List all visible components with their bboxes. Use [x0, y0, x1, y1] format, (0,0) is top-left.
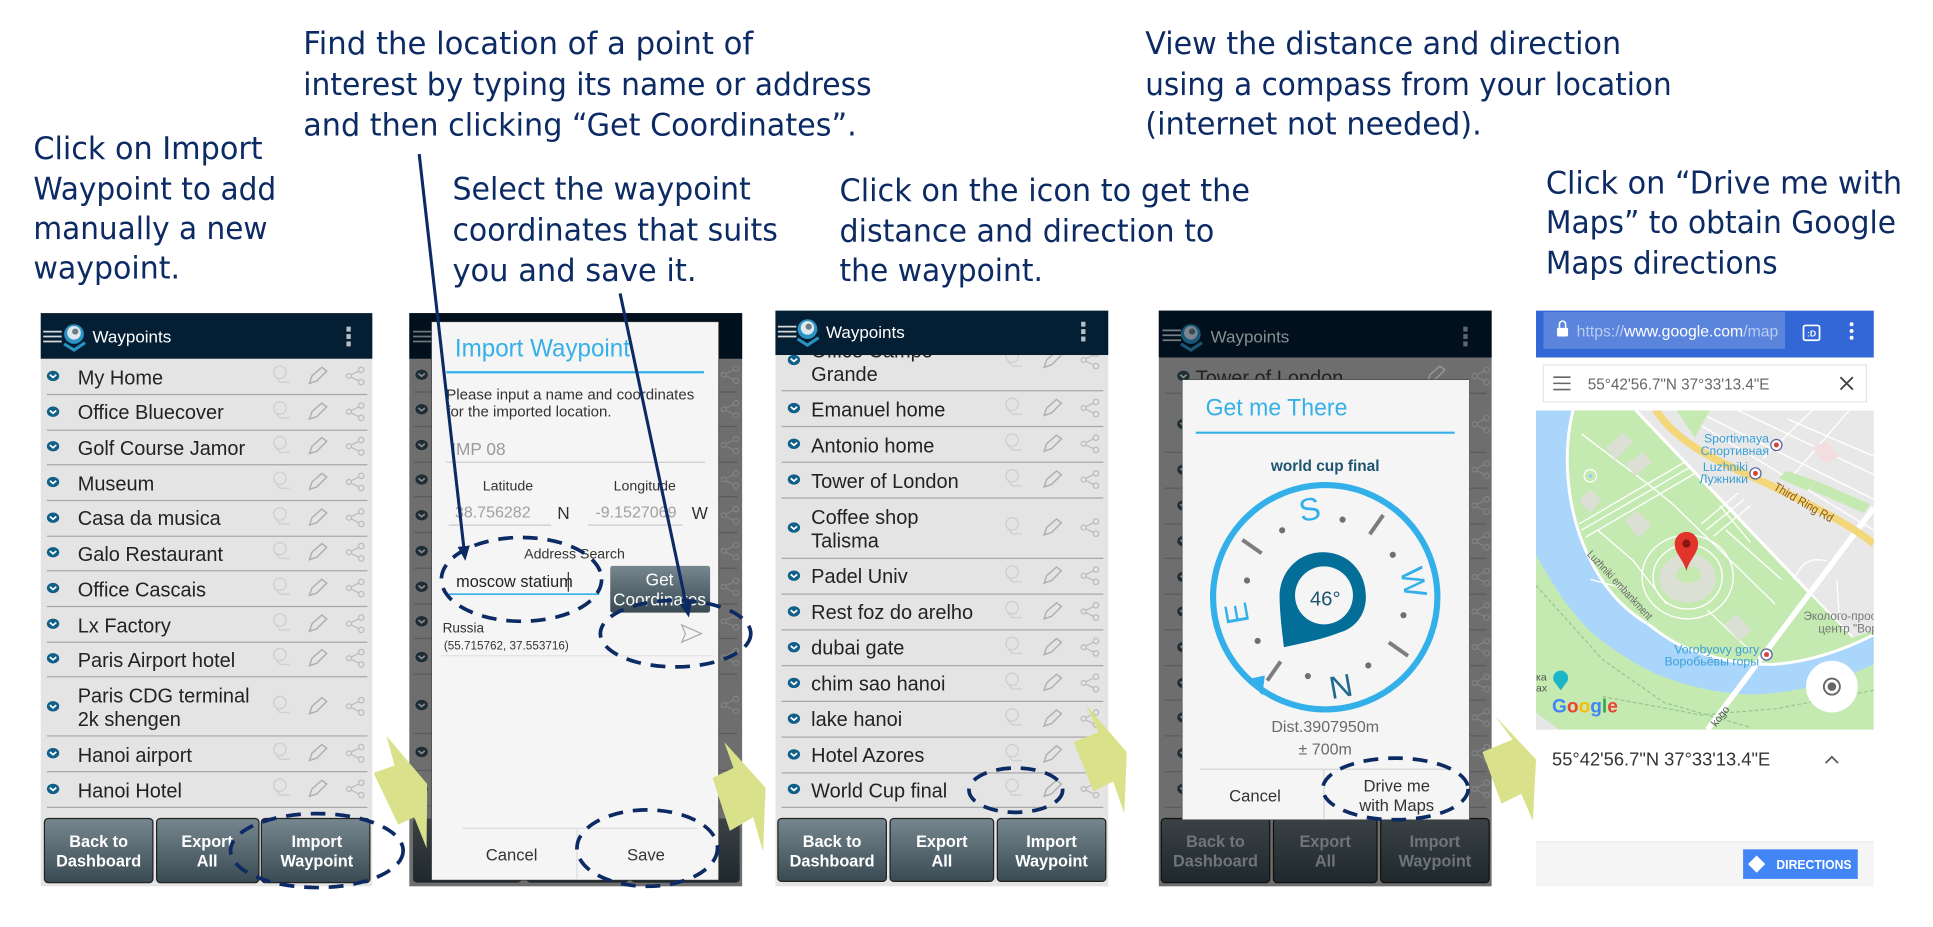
panel: phone 2 import waypoint background	[409, 313, 742, 886]
phone 3 list rows: Hotel Azores	[811, 745, 924, 767]
callout: import waypoint instruction: manually a new	[33, 211, 268, 247]
coordinates line: 55°42'56.7"N 37°33'13.4"E	[1552, 749, 1770, 770]
callout: import waypoint instruction	[33, 131, 276, 287]
dialog form fields	[446, 439, 709, 594]
callout: click icon instruction: the waypoint.	[840, 253, 1043, 289]
phone 3 list rows: Padel Univ	[811, 566, 908, 588]
phone 3 list rows: Coffee shop	[811, 507, 918, 529]
phone 3 list rows: lake hanoi	[811, 709, 902, 731]
phone 1 list rows: 2k shengen	[78, 709, 181, 731]
panel: phone 1 waypoints list	[41, 313, 372, 886]
callout: drive me with maps instruction: Click on “Drive me with	[1546, 166, 1902, 202]
dialog actions: Cancel	[486, 845, 538, 864]
phone 1 list rows: Golf Course Jamor	[78, 438, 246, 460]
search result: Russia	[443, 620, 484, 635]
dashed ellipse: save	[577, 810, 717, 886]
phone 3 list rows	[782, 340, 1103, 807]
map labels: Luzhniki	[1703, 460, 1748, 474]
dialog actions: Cancel	[1229, 786, 1281, 805]
get coordinates button: Get	[646, 570, 674, 590]
phone 1 list rows: Paris CDG terminal	[78, 686, 250, 708]
get coordinates button	[610, 566, 710, 613]
phone 3 buttons: All	[931, 853, 952, 871]
dialog form fields: -9.1527069	[595, 504, 677, 522]
panel: phone 5 google maps	[1536, 311, 1885, 886]
place icon	[1553, 671, 1568, 690]
map labels: Vorobyovy gory	[1674, 642, 1760, 656]
map labels: центр "Воро	[1818, 622, 1885, 635]
directions footer	[1536, 842, 1874, 886]
dashed ellipse: pin icon	[969, 768, 1063, 812]
dialog form fields: IMP 08	[451, 439, 506, 459]
callout: select coordinates instruction: Select the waypoint	[452, 172, 751, 208]
panel: phone 4 background: Dashboard	[1173, 853, 1258, 871]
phone 3 list rows: Office Campo	[811, 340, 933, 362]
callout: click icon instruction	[840, 173, 1250, 289]
get coordinates button: Coordinates	[613, 589, 706, 609]
phone 3 buttons: Back to	[803, 833, 862, 851]
map pin	[1675, 532, 1698, 571]
dialog heading: Get me There	[1206, 394, 1347, 421]
compass	[1200, 473, 1450, 723]
phone 3 buttons: Import	[1026, 833, 1077, 851]
map labels: kogo	[1710, 704, 1732, 729]
dialog actions: Save	[627, 845, 665, 864]
map search box: 55°42'56.7"N 37°33'13.4"E	[1588, 377, 1769, 394]
phone 3 buttons: Dashboard	[790, 853, 875, 871]
panel: phone 4 background: Tower of London	[1196, 368, 1343, 390]
phone 3 list rows: Grande	[811, 364, 878, 386]
phone 1 buttons: Import	[292, 833, 343, 851]
metro icons	[1750, 439, 1782, 660]
phone 3 list rows: Talisma	[811, 530, 880, 552]
dialog form fields: Latitude	[483, 479, 533, 495]
dialog form fields: W	[692, 503, 709, 523]
callout: drive me with maps instruction: Maps directions	[1546, 246, 1778, 282]
phone 3 list rows: dubai gate	[811, 638, 904, 660]
dialog form fields: Longitude	[614, 479, 676, 495]
dialog description: for the imported location.	[446, 404, 612, 421]
panel: phone 3 waypoints list	[775, 311, 1108, 886]
locate button	[1806, 661, 1858, 713]
dialog actions	[1199, 769, 1452, 820]
browser bar	[1536, 311, 1874, 357]
phone 1 buttons: Waypoint	[281, 853, 354, 871]
map labels: Лужники	[1699, 472, 1748, 486]
panel: phone 4 background: Import	[1410, 833, 1461, 851]
panel: phone 4 background	[1159, 311, 1492, 886]
phone 1 list rows: My Home	[78, 368, 163, 390]
distance text	[1271, 718, 1379, 758]
phone 1 list rows: Paris Airport hotel	[78, 650, 235, 672]
callout: import waypoint instruction: Waypoint to add	[33, 172, 276, 208]
phone 3 list rows: Antonio home	[811, 435, 934, 457]
phone 1 buttons: Back to	[69, 833, 128, 851]
panel: get me there dialog	[1182, 380, 1469, 820]
map labels: Luzhniki embankment	[1584, 549, 1655, 623]
distance text: ± 700m	[1299, 740, 1352, 758]
phone 3 buttons	[778, 819, 1106, 881]
map labels: Воробьёвы горы	[1664, 655, 1759, 669]
compass pin with bearing: 46°	[1310, 588, 1341, 610]
dashed ellipse: send icon	[600, 600, 751, 667]
callout: select coordinates instruction	[452, 172, 778, 289]
panel: phone 4 background: Export	[1299, 833, 1352, 851]
phone 3 list rows: Rest foz do arelho	[811, 602, 973, 624]
callout: drive me with maps instruction	[1546, 166, 1902, 282]
phone 1 header	[41, 313, 372, 359]
map labels: Спортивная	[1701, 444, 1769, 458]
map labels: Sportivnaya	[1704, 432, 1769, 446]
phone 3 list rows: Emanuel home	[811, 400, 945, 422]
callout: compass instruction	[1145, 26, 1672, 142]
map	[1536, 409, 1885, 730]
dialog description: Please input a name and coordinates	[446, 386, 694, 403]
panel: import waypoint dialog	[432, 322, 719, 880]
callout: import waypoint instruction: waypoint.	[33, 251, 180, 287]
callout: compass instruction: View the distance and direction	[1145, 26, 1621, 62]
phone 3 list rows: World Cup final	[811, 781, 947, 803]
phone 1 buttons: Export	[181, 833, 233, 851]
phone 1 list rows: Office Bluecover	[78, 402, 224, 424]
arrow: lime step arrow 2	[713, 742, 766, 852]
map labels: Эколого-просв	[1804, 610, 1883, 623]
phone 1 list rows: Museum	[78, 474, 154, 496]
search result	[441, 620, 713, 656]
browser bar: https://www.google.com/map	[1577, 324, 1778, 341]
dashed ellipse: import waypoint button	[231, 814, 403, 888]
map labels: ах	[1536, 684, 1548, 695]
panel: phone 4 background: Back to	[1186, 833, 1245, 851]
phone 1 list rows: Hanoi airport	[78, 745, 192, 767]
phone 1 list rows	[47, 366, 367, 807]
phone 1 buttons: Dashboard	[56, 853, 141, 871]
phone 1 header: Waypoints	[93, 328, 171, 347]
callout: find location instruction: and then clicking “Get Coordinates”.	[303, 108, 857, 144]
phone 3 header	[775, 311, 1108, 355]
phone 3 list rows: Tower of London	[811, 471, 959, 493]
dialog actions: Drive me	[1363, 776, 1430, 795]
dialog title: Import Waypoint	[455, 334, 630, 362]
phone 1 buttons: All	[197, 853, 218, 871]
dashed ellipse: drive me with maps	[1323, 758, 1468, 820]
compass: N	[1326, 667, 1355, 706]
compass pin with bearing	[1280, 552, 1366, 647]
callout: import waypoint instruction: Click on Import	[33, 131, 263, 167]
dialog form fields: 38.756282	[455, 504, 531, 522]
phone 1 list rows: Casa da musica	[78, 508, 222, 530]
search result: (55.715762, 37.553716)	[444, 640, 569, 653]
dialog form fields: moscow statium	[456, 573, 573, 591]
phone 1 list rows: Office Cascais	[78, 580, 206, 602]
compass: E	[1217, 600, 1256, 627]
phone 1 list rows: Lx Factory	[78, 615, 171, 637]
callout: select coordinates instruction: you and save it.	[452, 253, 697, 289]
callout: select coordinates instruction: coordinates that suits	[452, 212, 778, 248]
distance text: Dist.3907950m	[1271, 718, 1379, 736]
phone 1 buttons	[44, 819, 370, 883]
callout: drive me with maps instruction: Maps” to obtain Google	[1546, 205, 1896, 241]
callout: find location instruction: Find the location of a point of	[303, 26, 754, 62]
map labels: ка	[1536, 672, 1547, 683]
compass: W	[1393, 564, 1434, 601]
google logo: Google	[1552, 697, 1618, 718]
map labels	[1536, 432, 1885, 729]
phone 3 header: Waypoints	[826, 323, 905, 342]
dialog form fields: Address Search	[524, 546, 625, 562]
arrow: lime step arrow 3	[1074, 705, 1127, 814]
dialog description	[446, 386, 694, 421]
map labels: Third Ring Rd	[1771, 480, 1836, 525]
callout: click icon instruction: distance and direction to	[840, 214, 1214, 250]
dialog actions	[462, 828, 698, 879]
callout: compass instruction: (internet not needed).	[1145, 106, 1482, 142]
panel: phone 4 background: All	[1315, 853, 1336, 871]
browser bar: :D	[1807, 329, 1816, 339]
arrow: lime step arrow 4	[1482, 716, 1536, 821]
callout: find location instruction: interest by typing its name or address	[303, 67, 872, 103]
callout: compass instruction: using a compass from your location	[1145, 67, 1672, 103]
waypoint name: world cup final	[1270, 458, 1380, 475]
map search box	[1543, 365, 1866, 402]
dialog form fields: N	[557, 503, 570, 523]
phone 3 buttons: Export	[916, 833, 968, 851]
phone 1 list rows: Galo Restaurant	[78, 544, 223, 566]
phone 3 list rows: chim sao hanoi	[811, 673, 945, 695]
arrow: lime step arrow 1	[374, 736, 427, 848]
directions footer: DIRECTIONS	[1776, 857, 1852, 872]
callout: click icon instruction: Click on the icon to get the	[840, 173, 1250, 209]
phone 1 list rows: Hanoi Hotel	[78, 781, 182, 803]
phone 3 buttons: Waypoint	[1015, 853, 1088, 871]
arrow: to address search	[419, 154, 465, 556]
compass: S	[1296, 490, 1323, 529]
dialog actions: with Maps	[1358, 796, 1434, 815]
arrow: to get coordinates	[620, 293, 688, 613]
panel: phone 4 background: Waypoints	[1211, 328, 1289, 347]
panel: phone 4 background: Waypoint	[1399, 853, 1472, 871]
callout: find location instruction	[303, 26, 872, 144]
dashed ellipse: address search	[441, 537, 602, 621]
